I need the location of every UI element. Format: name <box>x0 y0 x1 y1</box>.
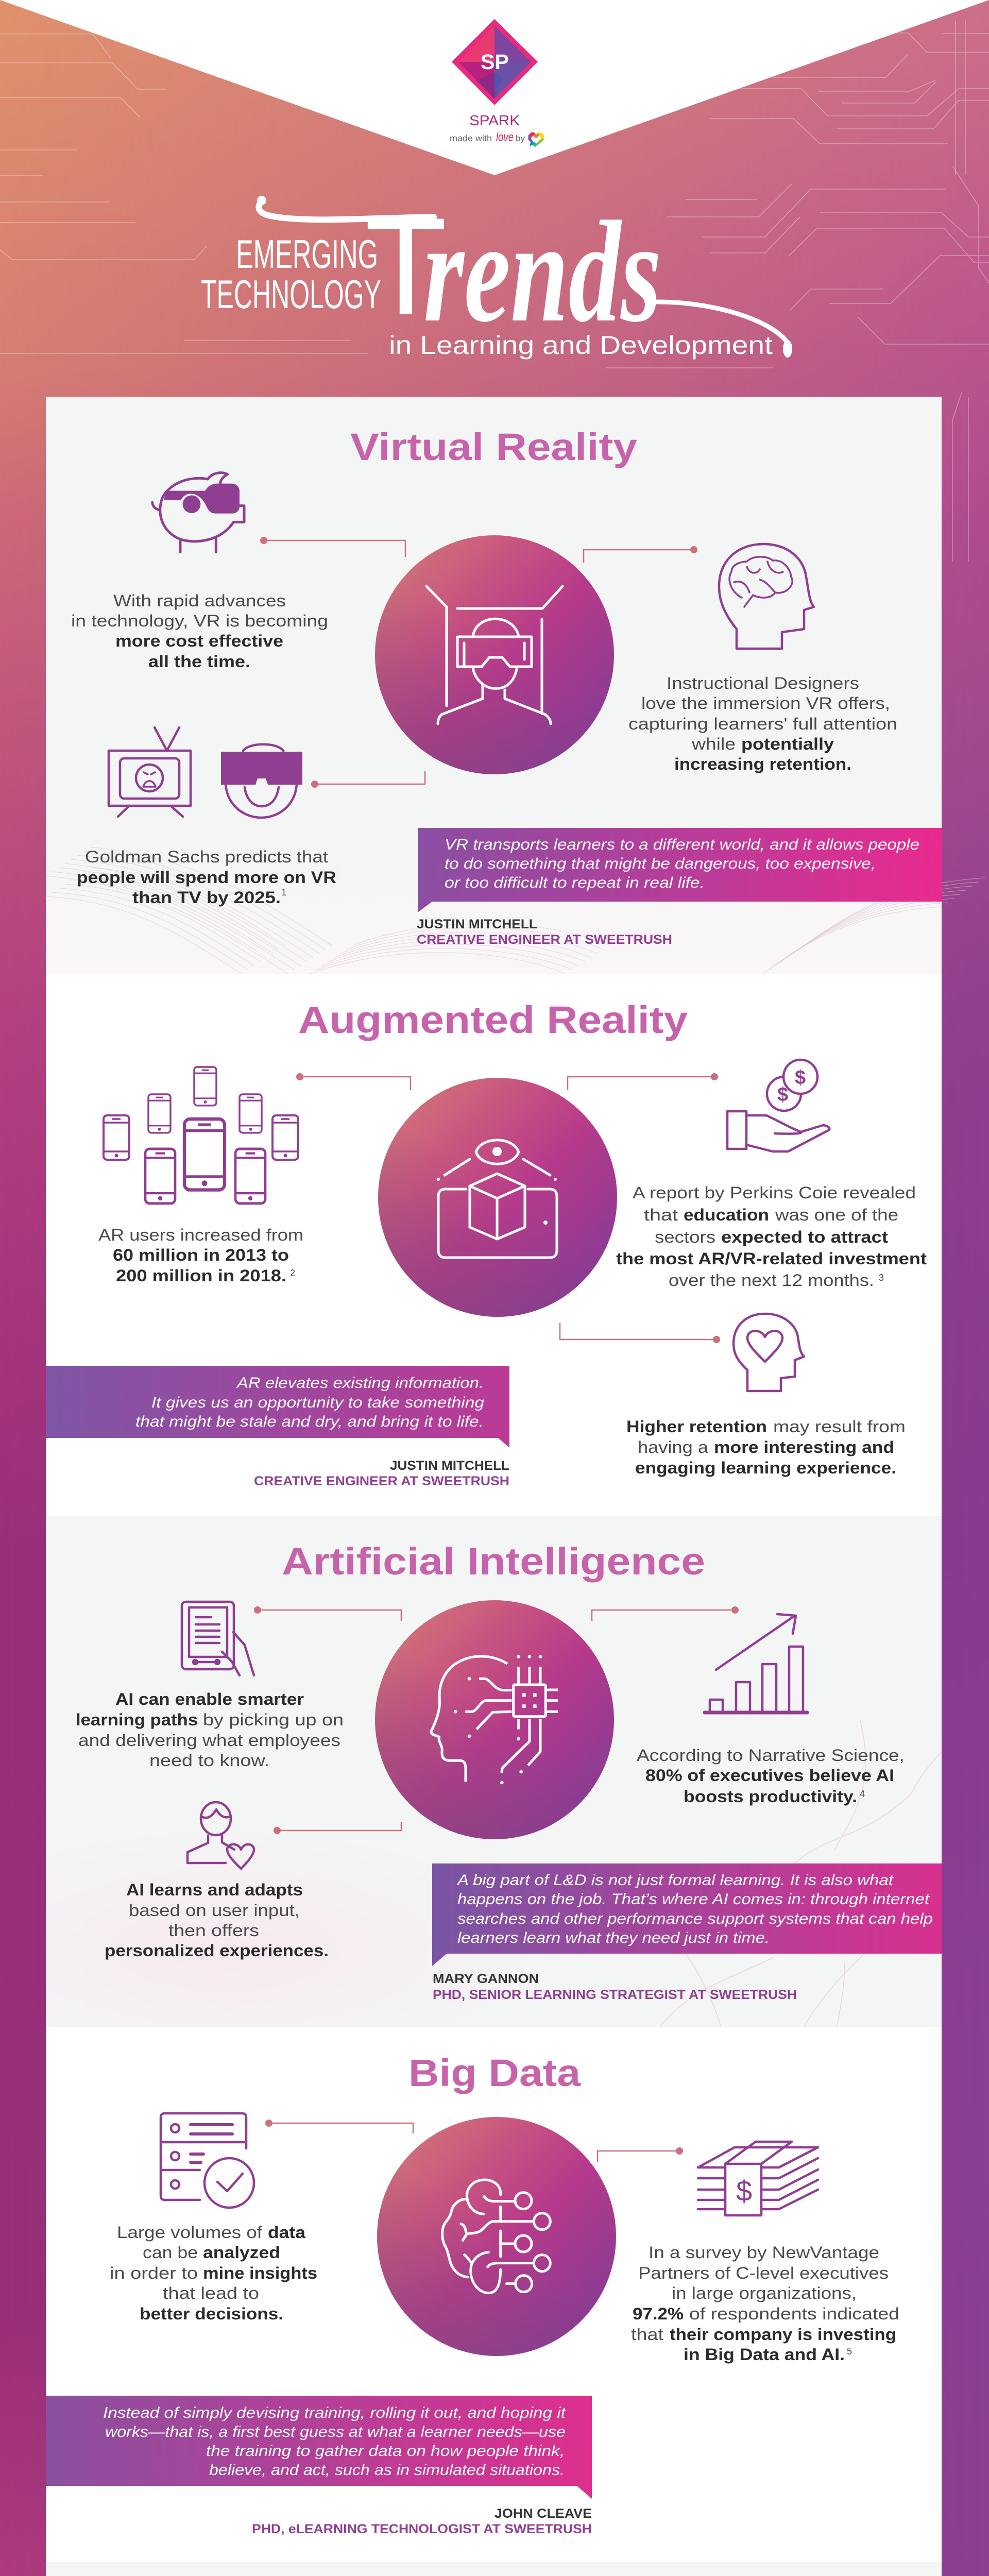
text: goldman sachs: people will spend more on VR <box>77 868 336 887</box>
heading: Artificial Intelligence <box>282 1540 705 1583</box>
text: personalized experiences: personalized experiences. <box>105 1941 329 1960</box>
made with love by: by <box>516 133 525 143</box>
callout: AI quote: learners learn what they need just in time. <box>457 1929 770 1946</box>
callout: Big Data quote: Instead of simply devising training, rolling it out, and hoping it <box>103 2404 567 2421</box>
text: perkins coie: 3 <box>879 1273 884 1283</box>
SPARK wordmark: SPARK <box>469 112 520 128</box>
text: goldman sachs: 1 <box>281 887 286 897</box>
text: instructional designers: while <box>691 735 736 753</box>
icon: brain in head <box>719 544 814 649</box>
text: higher retention: may result from <box>773 1417 906 1436</box>
text: newvantage survey: 97.2% <box>633 2304 684 2323</box>
attribution: JOHN CLEAVE <box>494 2506 592 2521</box>
text: AR users <box>98 1226 303 1285</box>
connector lines <box>254 1606 739 1834</box>
text: perkins coie: education <box>684 1206 769 1224</box>
text: perkins coie: was one of the <box>775 1206 898 1224</box>
icon: growth chart <box>705 1614 807 1713</box>
text: AR users: 2 <box>290 1268 295 1278</box>
central circle with AI head icon <box>375 1600 614 1839</box>
text: AR users: 60 million in 2013 to <box>113 1246 289 1264</box>
title: emerging technology: TECHNOLOGY <box>201 272 381 317</box>
text: smarter learning paths: need to know. <box>149 1751 269 1770</box>
SPARK logo <box>450 19 544 147</box>
text: personalized experiences: then offers <box>168 1921 259 1940</box>
text: personalized experiences: AI learns and adapts <box>126 1880 303 1899</box>
subtitle: in Learning and Development <box>389 331 773 360</box>
title: Trends script <box>257 189 792 358</box>
callout: VR quote: to do something that might be dangerous, too expensive, <box>445 855 876 872</box>
text: newvantage survey: that <box>631 2325 663 2344</box>
text: newvantage survey: In a survey by NewVantage <box>649 2243 879 2262</box>
heading: Augmented Reality <box>298 998 688 1041</box>
callout: VR quote <box>418 828 942 912</box>
text: large volumes: can be <box>143 2243 198 2262</box>
icon: diamond badge: SP <box>481 50 509 74</box>
icon: hand holding coins: $ <box>795 1067 806 1089</box>
text: narrative science: 4 <box>860 1789 865 1799</box>
white header chevron <box>0 0 989 175</box>
text: perkins coie: expected to attract <box>721 1228 888 1246</box>
text: AR users: 200 million in 2018. <box>116 1266 286 1285</box>
icon: tablet in hand <box>182 1602 254 1675</box>
title <box>201 189 792 360</box>
title: emerging technology <box>201 231 381 317</box>
callout: AR quote: It gives us an opportunity to take something <box>151 1394 484 1411</box>
icon: piggy bank with VR headset <box>152 473 244 552</box>
text: personalized experiences <box>105 1880 329 1960</box>
callout: AI quote <box>432 1863 942 1966</box>
text: large volumes: better decisions. <box>140 2304 283 2323</box>
connector lines <box>260 537 697 788</box>
text: goldman sachs: than TV by 2025. <box>132 888 281 907</box>
callout: AR quote <box>46 1366 509 1448</box>
text: narrative science: According to Narrative Science, <box>637 1746 905 1765</box>
panel: Artificial Intelligence <box>46 1516 942 2027</box>
panel background <box>46 1516 942 2027</box>
text: narrative science: boosts productivity. <box>684 1787 857 1806</box>
text: newvantage survey <box>631 2243 899 2364</box>
callout: AR quote: AR elevates existing information. <box>236 1375 484 1392</box>
central circle with data brain icon <box>377 2117 616 2356</box>
callout: VR quote: VR transports learners to a different world, and it allows people <box>445 836 919 853</box>
text: narrative science: 80% of executives believe AI <box>645 1766 894 1785</box>
attribution: CREATIVE ENGINEER AT SWEETRUSH <box>417 933 672 947</box>
text: instructional designers: love the immersion VR offers, <box>641 694 890 713</box>
text: perkins coie: sectors <box>655 1228 715 1246</box>
text: newvantage survey: Partners of C-level executives <box>638 2264 889 2282</box>
callout: Big Data quote <box>46 2396 592 2499</box>
icon: happy face with VR headset <box>221 744 302 818</box>
panel: Augmented Reality <box>46 974 942 1516</box>
attribution: PHD, eLEARNING TECHNOLOGIST AT SWEETRUSH <box>252 2522 592 2536</box>
central circle with AR icon <box>378 1078 617 1317</box>
callout: AR quote: that might be stale and dry, and bring it to life. <box>135 1413 484 1430</box>
attribution <box>252 2506 592 2536</box>
attribution <box>417 917 672 947</box>
text: instructional designers: increasing retention. <box>674 755 851 773</box>
attribution: CREATIVE ENGINEER AT SWEETRUSH <box>254 1474 509 1488</box>
text: perkins coie: the most AR/VR-related investment <box>616 1249 927 1268</box>
panel: Big Data <box>46 2027 942 2562</box>
text: cost effective: With rapid advances <box>113 591 286 610</box>
panel background <box>46 2027 942 2562</box>
attribution <box>254 1459 509 1488</box>
text: higher retention: more interesting and <box>714 1438 894 1456</box>
text: goldman sachs <box>77 848 336 907</box>
text: large volumes: Large volumes of <box>117 2223 262 2242</box>
text: personalized experiences: based on user input, <box>129 1901 300 1920</box>
attribution: JUSTIN MITCHELL <box>417 917 537 931</box>
text: large volumes: analyzed <box>203 2243 280 2262</box>
text: instructional designers: Instructional Designers <box>667 674 859 692</box>
text: perkins coie: over the next 12 months. <box>669 1271 874 1290</box>
icon: person with heart <box>187 1802 254 1869</box>
icon: diamond badge <box>452 19 538 105</box>
title: Trends script: rends <box>423 191 661 352</box>
text: large volumes: that lead to <box>163 2284 259 2302</box>
text: goldman sachs: Goldman Sachs predicts that <box>85 848 328 866</box>
text: narrative science <box>637 1746 905 1806</box>
text: newvantage survey: in large organizations, <box>672 2284 857 2302</box>
text: instructional designers: potentially <box>741 735 834 753</box>
text: smarter learning paths: by picking up on <box>203 1710 344 1729</box>
callout: Big Data quote: believe, and act, such as in simulated situations. <box>209 2462 565 2479</box>
icon: stack of money: $ <box>736 2175 752 2207</box>
attribution: PHD, SENIOR LEARNING STRATEGIST AT SWEETRUSH <box>433 1988 797 2002</box>
text: newvantage survey: their company is investing <box>670 2325 896 2344</box>
text: perkins coie: A report by Perkins Coie revealed <box>633 1183 916 1202</box>
icon: head with heart <box>734 1314 804 1391</box>
text: instructional designers <box>628 674 897 773</box>
text: perkins coie <box>616 1183 927 1290</box>
callout: Big Data quote: works—that is, a first best guess at what a learner needs—use <box>105 2424 566 2441</box>
text: perkins coie: that <box>644 1206 678 1224</box>
heading: Virtual Reality <box>350 426 637 468</box>
callout: AI quote: A big part of L&D is not just formal learning. It is also what <box>456 1872 894 1889</box>
text: higher retention: engaging learning experience. <box>635 1459 896 1477</box>
made with love by: love <box>496 130 514 144</box>
circuit line pattern top <box>0 21 989 562</box>
text: cost effective: more cost effective <box>115 632 283 650</box>
text: newvantage survey: 5 <box>847 2346 852 2357</box>
text: large volumes: mine insights <box>203 2264 317 2282</box>
heading: Big Data <box>408 2052 581 2094</box>
panel background <box>46 974 942 1516</box>
panel: Podcasts <box>46 2562 942 2576</box>
icon: TV with sad face <box>109 727 191 817</box>
decorative network <box>46 1721 942 2027</box>
text: cost effective: in technology, VR is becoming <box>71 612 328 630</box>
text: large volumes: in order to <box>110 2264 198 2282</box>
text: higher retention: having a <box>638 1438 708 1456</box>
connector lines <box>265 2120 683 2162</box>
text: cost effective <box>71 591 328 671</box>
icon: servers with check <box>161 2113 254 2208</box>
text: newvantage survey: of respondents indicated <box>689 2304 899 2323</box>
text: instructional designers: capturing learners' full attention <box>628 715 897 733</box>
text: smarter learning paths: AI can enable smarter <box>115 1690 304 1708</box>
made with love by <box>450 130 544 147</box>
text: large volumes: data <box>268 2223 305 2242</box>
title: Trends script: T <box>365 189 447 343</box>
icon: smartphones <box>104 1067 298 1204</box>
callout: AI quote: happens on the job. That’s where AI comes in: through internet <box>457 1891 930 1908</box>
text: smarter learning paths <box>76 1690 344 1770</box>
panel background <box>46 2562 942 2576</box>
attribution: JUSTIN MITCHELL <box>390 1459 509 1473</box>
text: higher retention <box>626 1417 906 1477</box>
made with love by: made with <box>450 133 492 143</box>
text: large volumes <box>110 2223 317 2323</box>
connector lines <box>296 1073 720 1343</box>
text: higher retention: Higher retention <box>626 1417 767 1436</box>
panel background <box>46 397 942 974</box>
panel: Virtual Reality <box>46 397 985 974</box>
icon: hand holding coins <box>727 1060 829 1151</box>
attribution <box>433 1972 797 2002</box>
text: AR users: AR users increased from <box>98 1226 303 1244</box>
title: emerging technology: EMERGING <box>236 231 378 277</box>
callout: VR quote: or too difficult to repeat in real life. <box>445 874 705 891</box>
text: smarter learning paths: and delivering what employees <box>78 1731 340 1750</box>
attribution: MARY GANNON <box>433 1972 539 1986</box>
decorative swirl <box>46 804 985 974</box>
icon: hand holding coins: $ <box>777 1084 788 1106</box>
callout: AI quote: searches and other performance support systems that can help <box>457 1910 933 1927</box>
central circle with VR headset icon <box>375 535 614 774</box>
icon: stack of money <box>698 2142 818 2215</box>
text: newvantage survey: in Big Data and AI. <box>684 2345 845 2364</box>
text: cost effective: all the time. <box>148 652 250 671</box>
callout: Big Data quote: the training to gather data on how people think, <box>206 2443 565 2460</box>
text: smarter learning paths: learning paths <box>76 1710 198 1729</box>
